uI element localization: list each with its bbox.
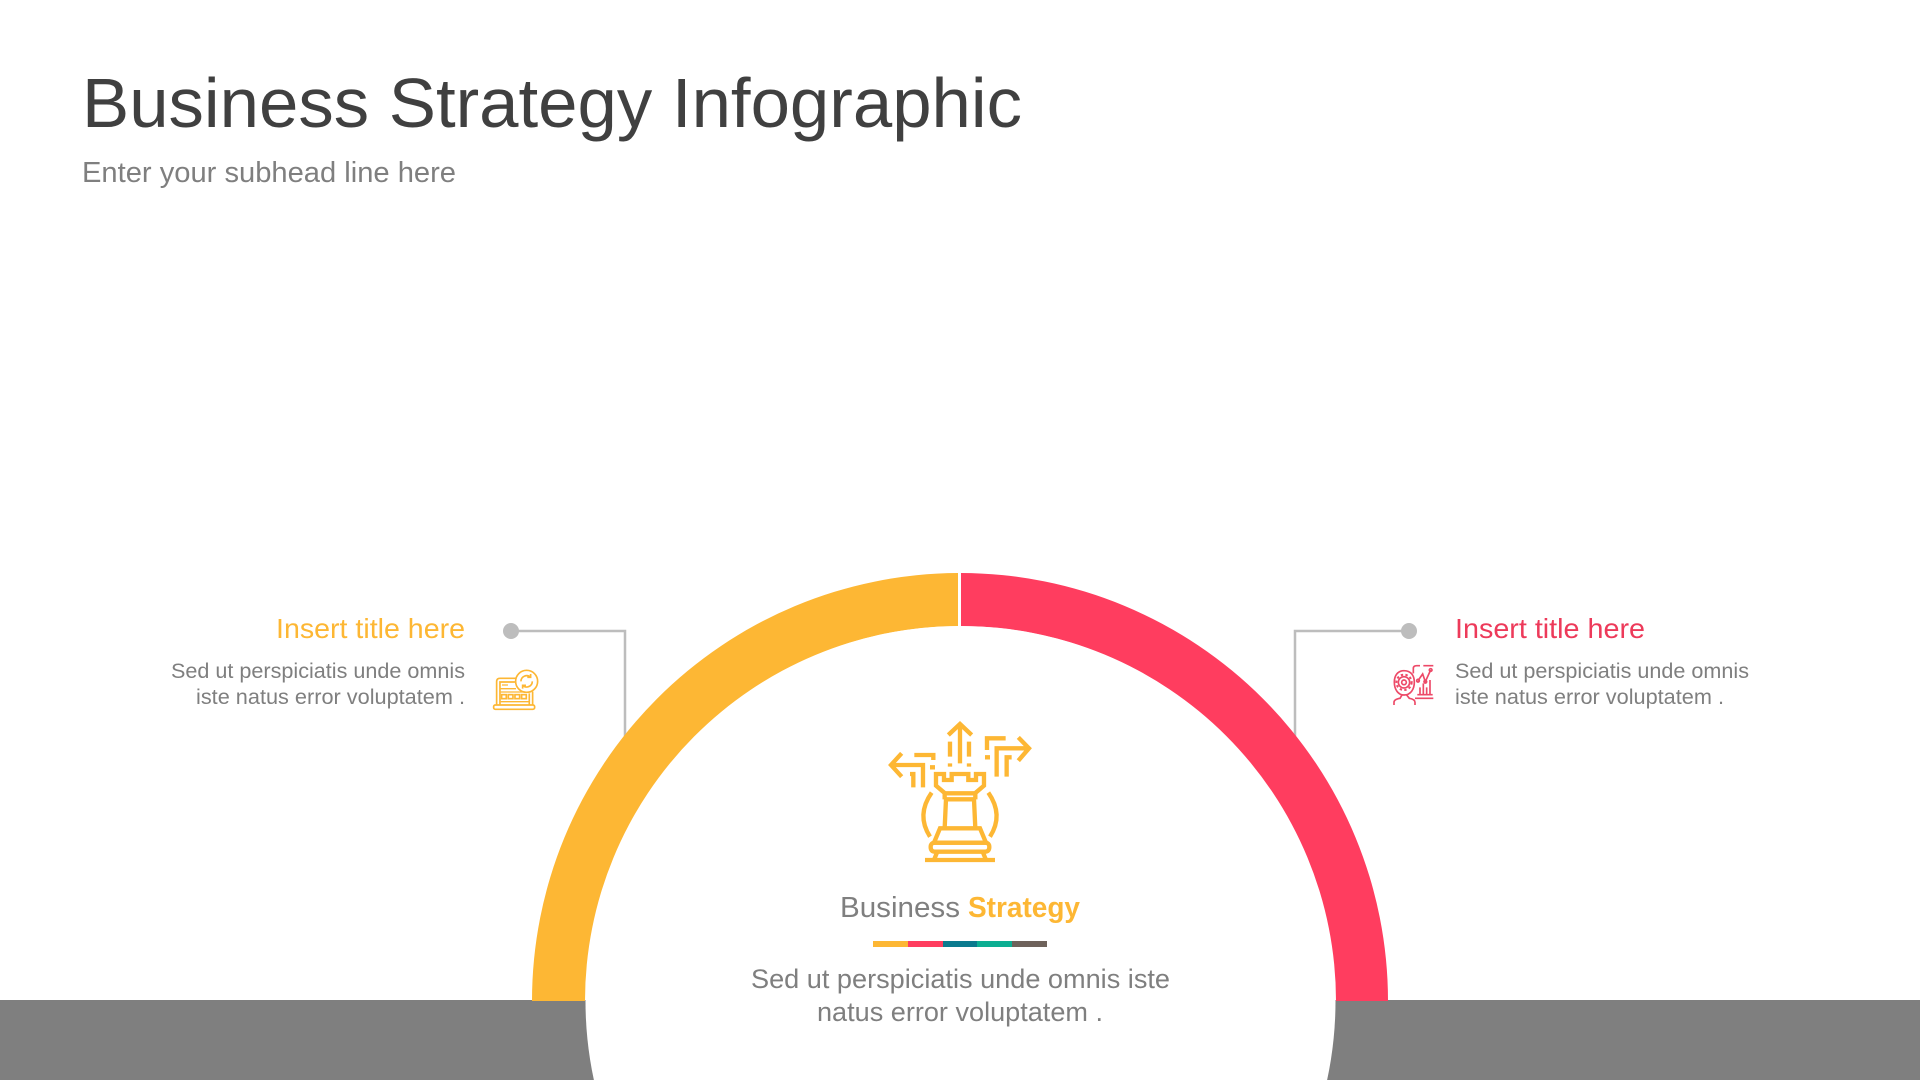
colour bar xyxy=(873,941,1047,947)
left item title: Insert title here xyxy=(276,613,465,644)
left item description xyxy=(171,660,465,709)
right item title: Insert title here xyxy=(1455,613,1645,644)
centre description xyxy=(751,964,1170,1027)
arc segment: orange xyxy=(532,573,958,1001)
arc segment: red xyxy=(961,573,1388,1001)
title: Business Strategy Infographic xyxy=(82,64,1022,142)
icon: laptop with sync xyxy=(494,670,538,709)
left connector line xyxy=(503,623,625,740)
centre white circle xyxy=(586,626,1336,1080)
left item description: Sed ut perspiciatis unde omnis xyxy=(171,660,465,683)
right item description: iste natus error voluptatem . xyxy=(1455,686,1724,709)
centre heading: Business xyxy=(840,892,960,924)
icon: chess rook with arrows xyxy=(891,724,1029,860)
centre description: Sed ut perspiciatis unde omnis iste xyxy=(751,964,1170,994)
icon: head with gear and chart xyxy=(1394,666,1433,705)
left item description: iste natus error voluptatem . xyxy=(196,686,465,709)
right item description: Sed ut perspiciatis unde omnis xyxy=(1455,660,1749,683)
subtitle: Enter your subhead line here xyxy=(82,157,456,189)
centre description: natus error voluptatem . xyxy=(817,997,1103,1027)
right connector line xyxy=(1295,623,1417,740)
right item description xyxy=(1455,660,1749,709)
centre heading accent: Strategy xyxy=(968,892,1080,924)
grey base band xyxy=(0,1000,1920,1080)
